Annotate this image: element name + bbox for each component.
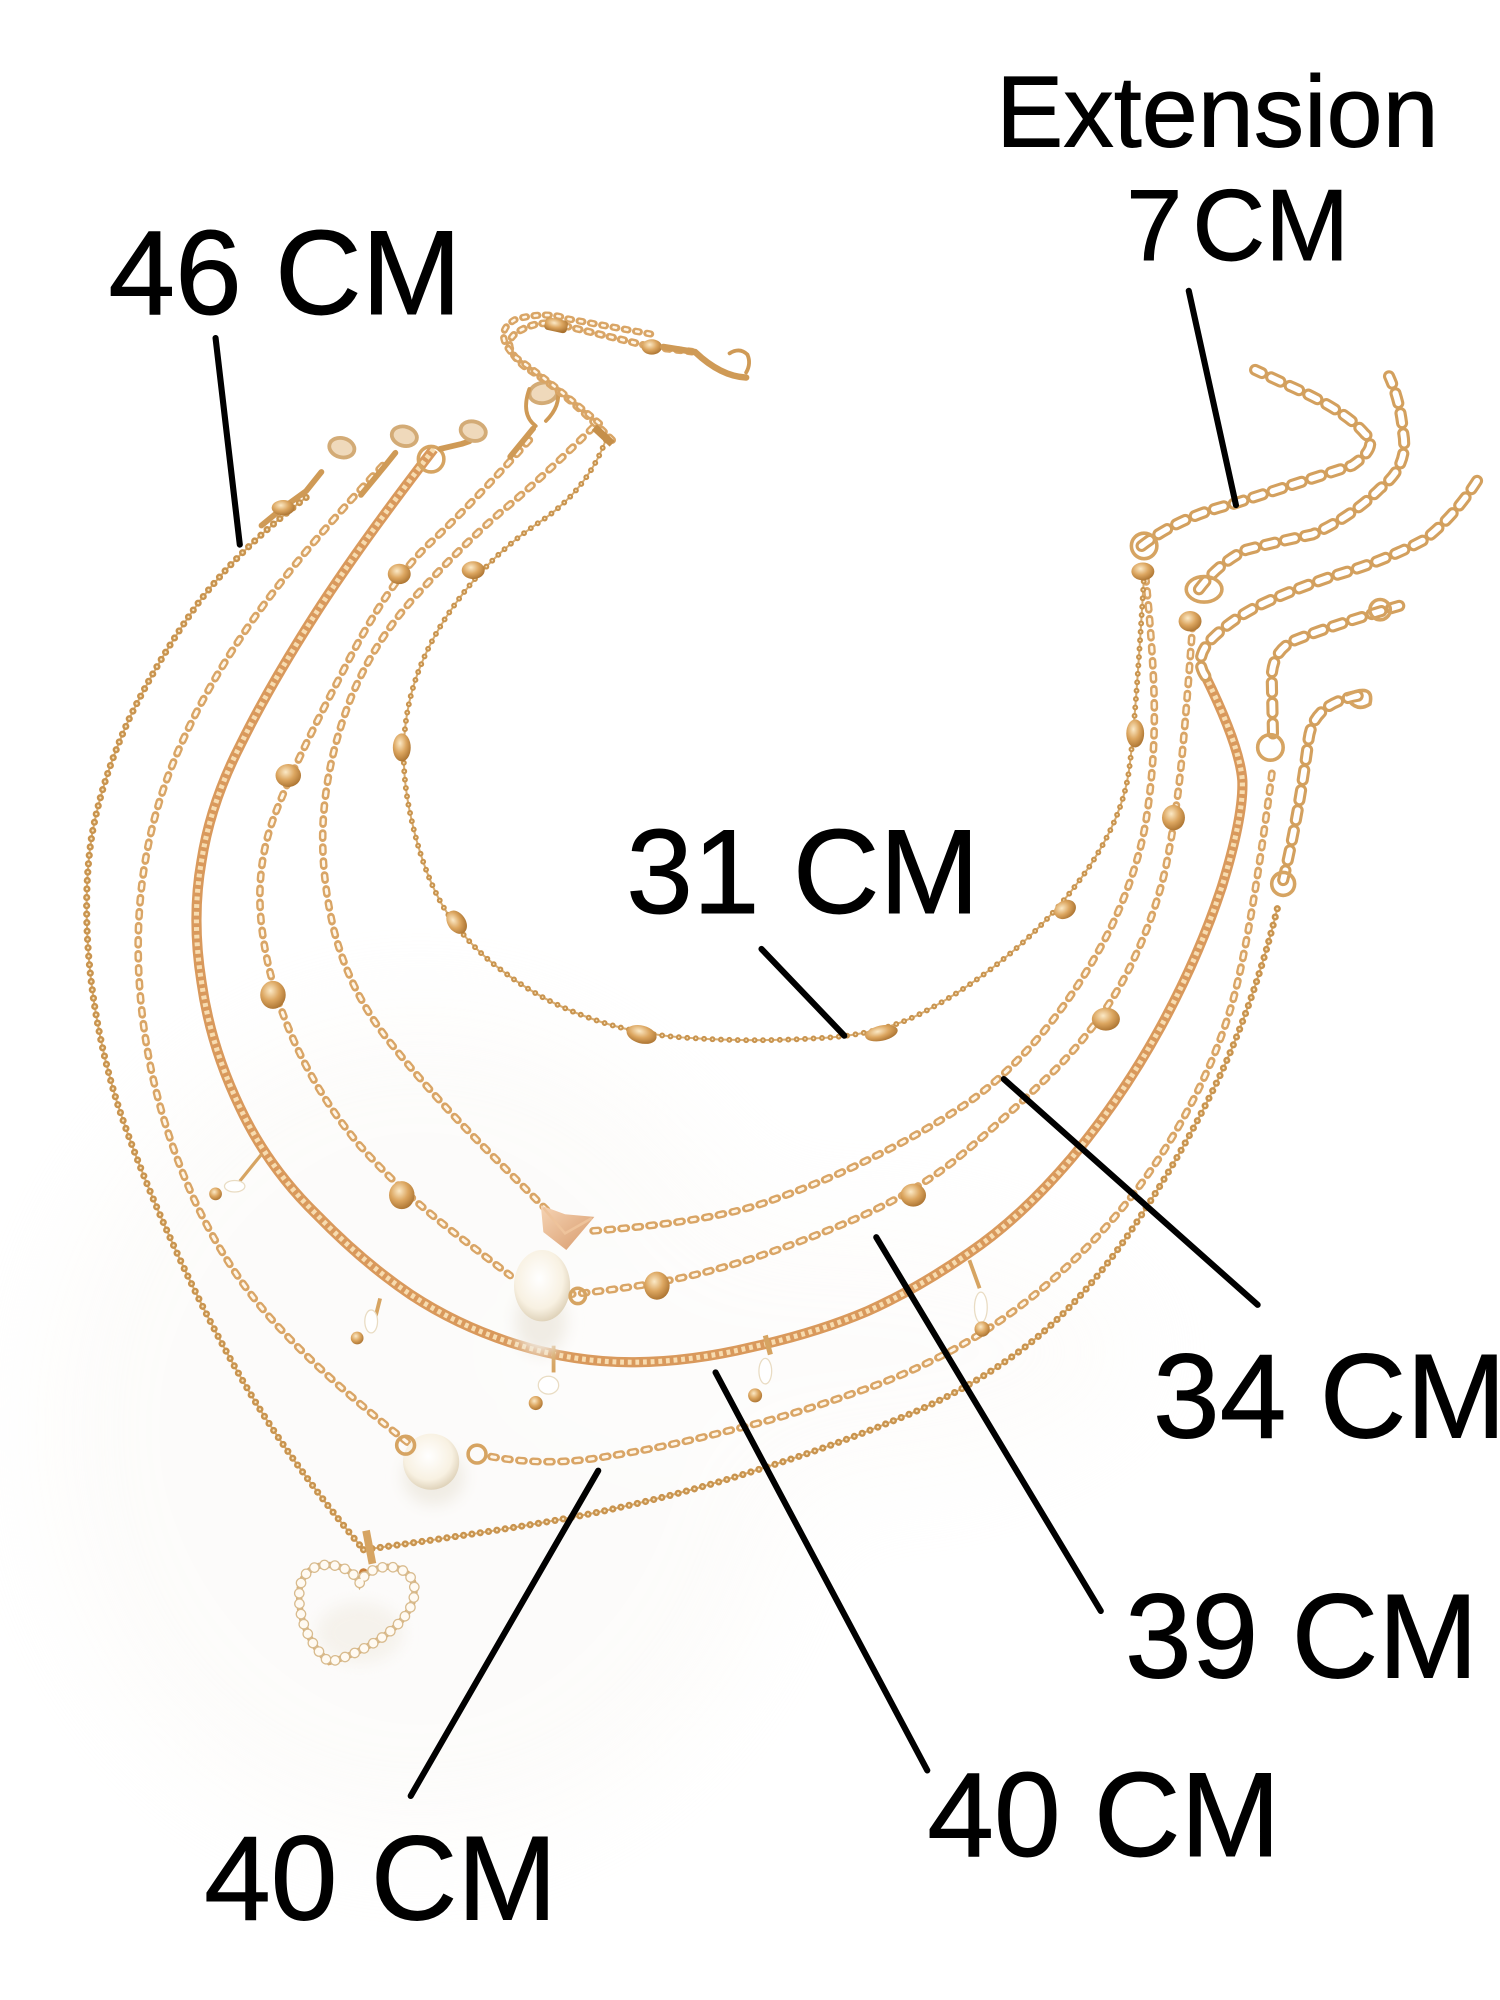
pendant: pearl heart xyxy=(299,1531,415,1663)
extension: 31 cm chain xyxy=(1131,370,1370,559)
necklace 40 cm: cable chain with baroque pearl xyxy=(138,424,1399,1505)
label: 40 cm cable chain: 40 CM xyxy=(204,1812,557,1946)
label: extension 7 cm: 7 CM xyxy=(1126,170,1349,282)
label: 46 cm: 46 CM xyxy=(108,206,461,340)
leader line: 40 cm cable chain xyxy=(411,1471,598,1796)
pendant: folded gold heart xyxy=(541,1205,594,1250)
necklace 46 cm: outer ball chain with pearl heart xyxy=(87,435,1371,1663)
leader line: 34 cm xyxy=(1004,1079,1258,1305)
leader line: 31 cm xyxy=(761,949,844,1036)
necklace 31 cm: short ball chain with beads xyxy=(393,315,1370,1047)
leader line: extension xyxy=(1189,291,1236,505)
label: extension heading: Extension xyxy=(996,57,1439,169)
leader line: 40 cm curb chain xyxy=(716,1372,927,1770)
extension: curb chain xyxy=(1201,481,1477,676)
necklace 34 cm: cable chain with rose gold heart xyxy=(323,427,1154,1250)
clasp: curb chain xyxy=(418,419,488,472)
top clasp chain: looped strand xyxy=(503,315,749,444)
beads: 39 cm chain xyxy=(260,564,1202,1300)
label: 40 cm curb chain: 40 CM xyxy=(927,1748,1280,1882)
drops: seed pearls xyxy=(209,1154,990,1410)
beads: 31 cm chain xyxy=(393,561,1154,1047)
leader line: 39 cm xyxy=(876,1237,1101,1611)
necklace 40 cm: curb chain with seed pearl drops xyxy=(196,419,1477,1410)
label: 31 cm: 31 CM xyxy=(626,805,979,939)
clasp: 46 cm chain xyxy=(261,435,357,526)
necklace 39 cm: cable chain with beads and large pearl xyxy=(260,376,1404,1355)
soft paper tint behind jewellery xyxy=(38,1008,1148,1849)
extension: 39 cm chain xyxy=(1186,376,1404,602)
label: 34 cm: 34 CM xyxy=(1153,1330,1500,1464)
clasp: 40 cm cable chain xyxy=(361,424,419,495)
clasp: 39 cm chain xyxy=(510,380,559,457)
extension: 46 cm chain xyxy=(1272,690,1371,895)
pendant: large pearl xyxy=(514,1250,585,1355)
extension: 40 cm cable chain xyxy=(1258,599,1399,760)
label: 39 cm: 39 CM xyxy=(1125,1569,1478,1703)
leader line: 46 cm xyxy=(216,338,240,545)
pendant: baroque pearl xyxy=(397,1434,486,1505)
